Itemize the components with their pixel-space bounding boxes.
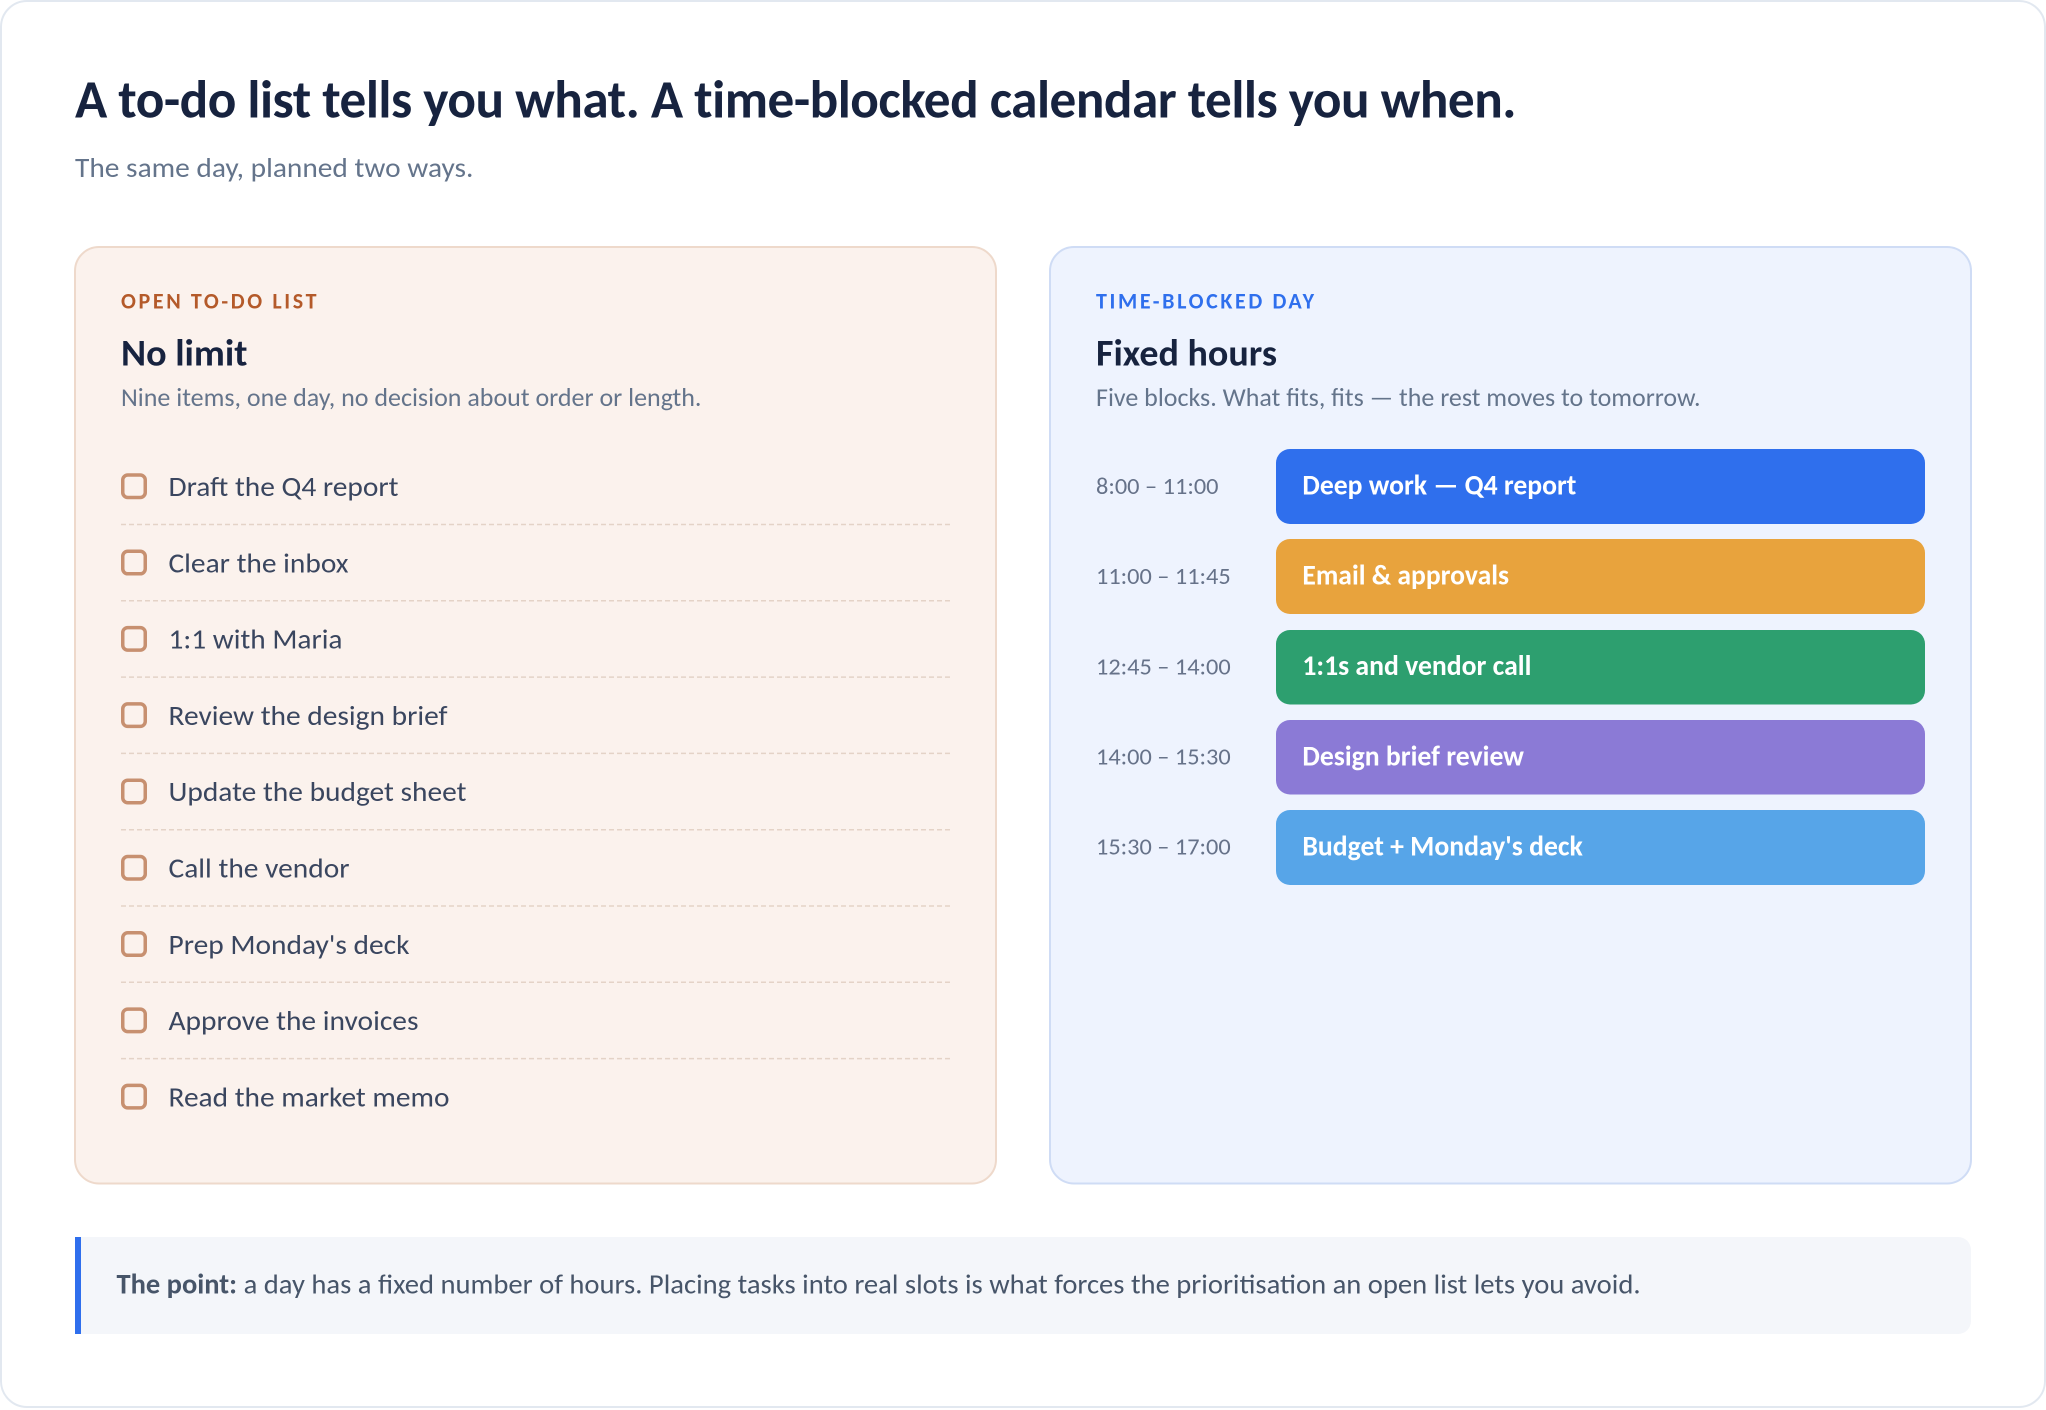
- time block: email and approvals: 11:00 – 11:45: [1096, 562, 1231, 591]
- eyebrow: open to-do list: OPEN TO-DO LIST: [121, 288, 317, 315]
- task: update the budget sheet: Update the budget sheet: [168, 774, 466, 809]
- panel: time-blocked day: [1050, 247, 1971, 1184]
- task: 1:1 with Maria: 1:1 with Maria: [168, 622, 342, 657]
- time block: email and approvals: [1096, 539, 1925, 614]
- time block: design brief review: Design brief review: [1302, 738, 1524, 773]
- panel description: Nine items, one day, no decision about order or length.: [121, 381, 702, 413]
- task: approve the invoices: Approve the invoices: [168, 1003, 419, 1038]
- time block: design brief review: [1096, 720, 1925, 794]
- panel heading: no limit: No limit: [121, 330, 248, 376]
- task: clear the inbox: Clear the inbox: [168, 545, 348, 580]
- time block: budget and Monday's deck: Budget + Monday's deck: [1302, 829, 1583, 864]
- panel description: Five blocks. What fits, fits — the rest moves to tomorrow.: [1096, 381, 1700, 413]
- dividers: [121, 524, 950, 1059]
- subtitle: The same day, planned two ways.: [75, 150, 474, 185]
- time block: design brief review: 14:00 – 15:30: [1096, 743, 1231, 772]
- time block: email and approvals: Email & approvals: [1302, 557, 1509, 592]
- callout: the point: The point:: [116, 1267, 237, 1302]
- time block: 1:1s and vendor call: 1:1s and vendor call: [1302, 648, 1531, 683]
- task: review the design brief: Review the design brief: [168, 698, 448, 733]
- time block: budget and Monday's deck: [1096, 810, 1925, 885]
- panel: open to-do list: [75, 247, 996, 1184]
- callout: the point: a day has a fixed number of hours. Placing tasks into real slots is what forces the prioritisation an open list lets you avoid.: [244, 1267, 1641, 1302]
- time block: deep work: [1096, 449, 1925, 524]
- task: draft the Q4 report: Draft the Q4 report: [168, 469, 398, 504]
- title: A to-do list tells you what. A time-blocked calendar tells you when.: [75, 67, 1516, 133]
- panel heading: fixed hours: Fixed hours: [1096, 330, 1277, 376]
- task: call the vendor: Call the vendor: [168, 850, 350, 886]
- time block: budget and Monday's deck: 15:30 – 17:00: [1096, 833, 1231, 862]
- task: prep Monday's deck: Prep Monday's deck: [168, 927, 410, 962]
- time block: 1:1s and vendor call: [1096, 630, 1925, 704]
- callout: the point: [75, 1237, 1971, 1334]
- time block: deep work: 8:00 – 11:00: [1096, 472, 1218, 501]
- time block: 1:1s and vendor call: 12:45 – 14:00: [1096, 652, 1231, 681]
- eyebrow: time-blocked day: TIME-BLOCKED DAY: [1096, 288, 1315, 315]
- task: read the market memo: Read the market memo: [168, 1079, 450, 1114]
- time block: deep work: Deep work — Q4 report: [1302, 467, 1577, 502]
